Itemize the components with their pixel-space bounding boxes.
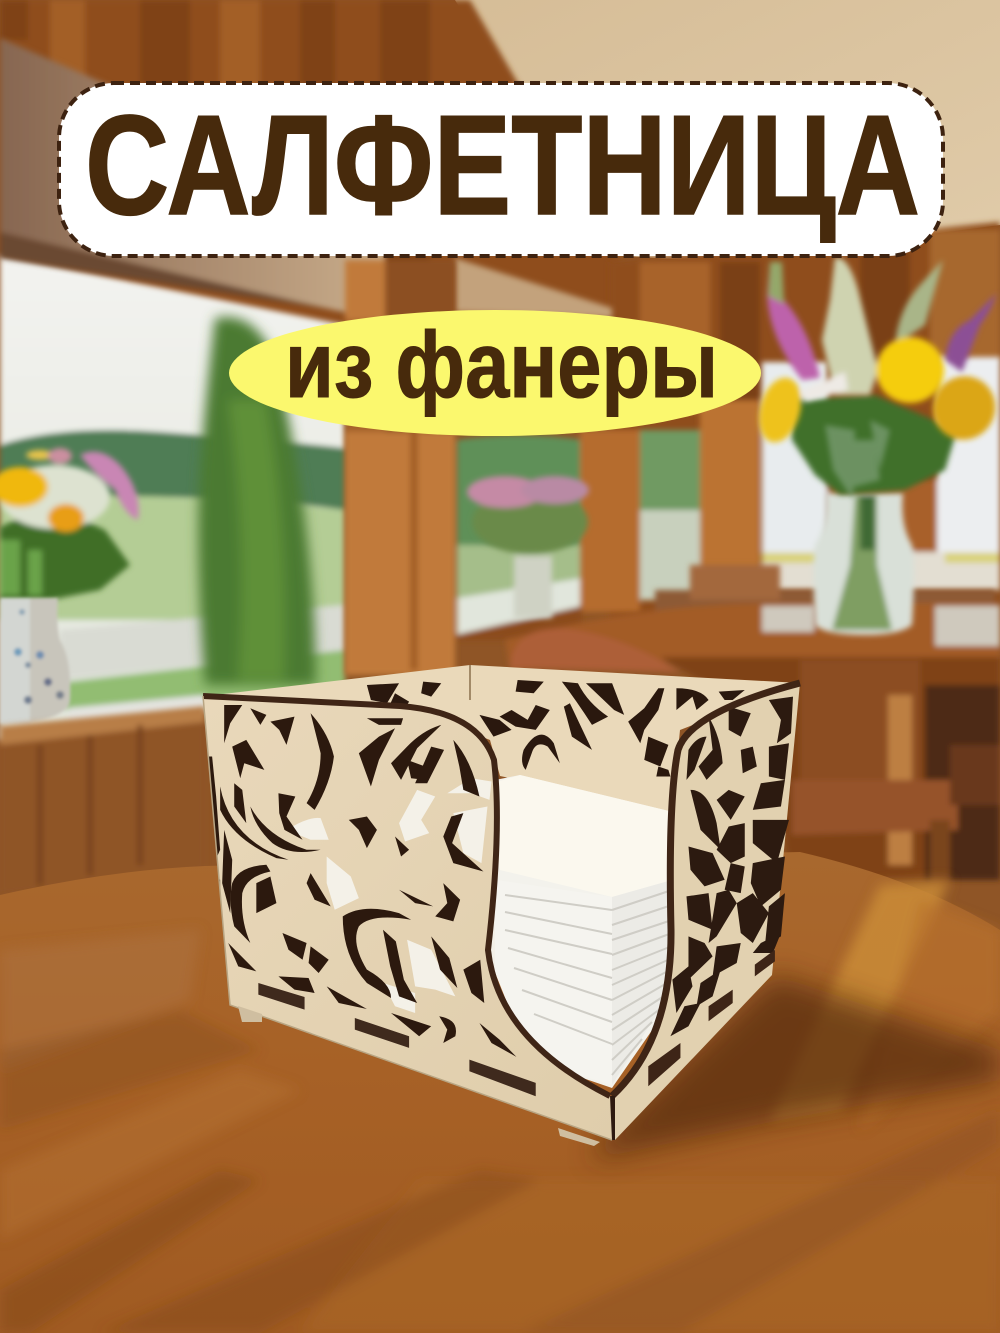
wooden pillars and middle windows: [345, 260, 1000, 675]
title badge: [59, 83, 943, 256]
white lupine: [822, 258, 878, 395]
middle background flower pot: [467, 476, 589, 618]
left flower vase: [0, 448, 139, 724]
foreground wooden table: [0, 852, 1000, 1333]
ceiling: [455, 0, 1000, 262]
feet: [238, 1006, 600, 1146]
napkin stack: [295, 775, 673, 1088]
left window view: [0, 255, 345, 740]
right wood wall: [610, 222, 1000, 620]
back panels: [215, 665, 800, 812]
background dining table and chairs: [505, 565, 1000, 880]
right side panel with cutouts: [612, 683, 800, 1140]
subtitle text: из фанеры: [285, 312, 718, 417]
front panel with floral cutouts: [203, 696, 612, 1146]
subtitle badge: [229, 310, 761, 436]
left wooden sill and wainscot: [0, 706, 205, 895]
shadow under box: [590, 975, 1000, 1160]
cypress tree: [198, 317, 316, 685]
right flower bouquet and vase: [752, 258, 1000, 635]
beige ceiling beams: [0, 38, 612, 322]
purple lupine right: [945, 293, 997, 372]
purple lupine left: [767, 262, 820, 380]
napkin seen through cutouts: [293, 778, 492, 1013]
green lupine: [895, 260, 943, 345]
plywood napkin holder: [203, 665, 800, 1146]
foliage: [790, 395, 957, 495]
glass vase: [814, 493, 914, 635]
yellow flowers: [876, 337, 944, 403]
wood wall top left: [0, 0, 620, 330]
